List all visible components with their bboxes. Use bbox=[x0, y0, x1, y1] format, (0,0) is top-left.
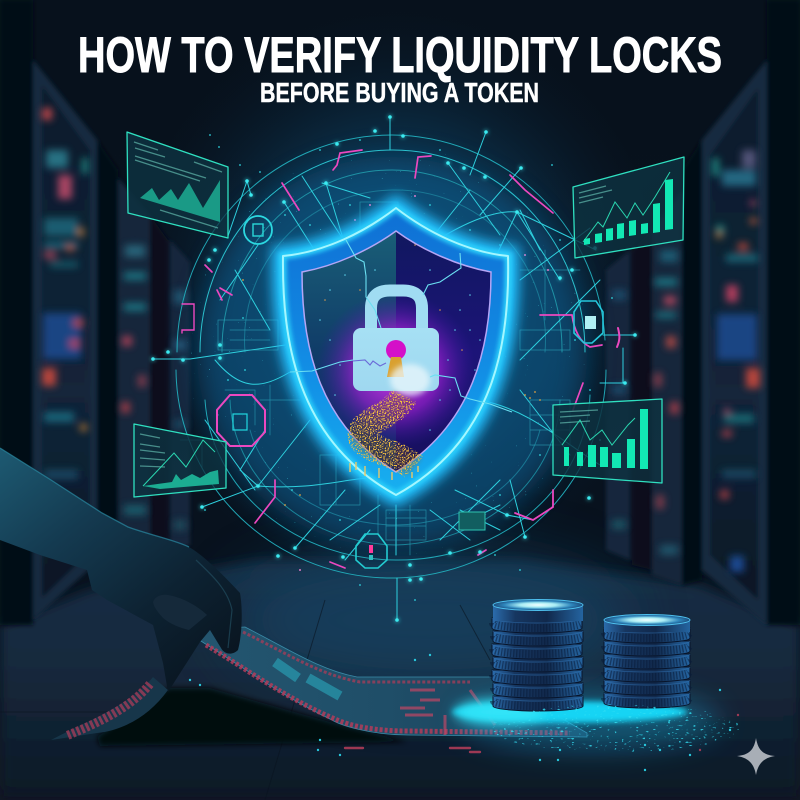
orbit rings bbox=[176, 135, 606, 578]
particle field bbox=[187, 147, 597, 557]
coin stack right bbox=[604, 614, 690, 708]
cracks bbox=[290, 240, 512, 412]
strip: main band bbox=[184, 627, 587, 737]
shield inner field bbox=[302, 232, 490, 471]
shield speckles bbox=[310, 245, 480, 445]
data panel: bottom left bbox=[134, 424, 226, 497]
node: pink octagon bbox=[217, 395, 265, 446]
grid boxes bbox=[180, 202, 580, 555]
paper strip shadow bbox=[97, 688, 408, 746]
shield bbox=[283, 208, 512, 495]
bar chart bbox=[564, 409, 648, 469]
circular holographic network bbox=[153, 117, 635, 620]
network lines bbox=[153, 117, 635, 620]
shield inner outline bbox=[302, 231, 491, 472]
network nodes bbox=[153, 117, 635, 620]
data panel: top left bbox=[127, 132, 228, 238]
rack lights right bbox=[612, 150, 760, 572]
node: qr octagon bbox=[574, 301, 603, 343]
keyhole bbox=[386, 340, 406, 377]
server racks right bbox=[606, 0, 800, 625]
data panel: top right bbox=[573, 157, 684, 258]
digital particles on floor bbox=[190, 655, 740, 770]
coin top face bbox=[604, 614, 690, 626]
hand bbox=[0, 448, 242, 692]
node: lock circle bbox=[244, 216, 272, 244]
gold token particles bbox=[350, 396, 418, 480]
icon: sparkle watermark bbox=[737, 738, 775, 775]
pink segments bbox=[182, 150, 619, 568]
rack lights left bbox=[42, 108, 186, 530]
floor bbox=[0, 550, 800, 800]
shield glow bbox=[283, 208, 508, 495]
bar chart bbox=[584, 179, 673, 245]
octagon nodes bbox=[217, 216, 603, 568]
padlock bbox=[353, 290, 439, 396]
shield band bbox=[283, 208, 508, 495]
strip: left band bbox=[51, 677, 168, 740]
coin glow bbox=[452, 690, 720, 750]
server racks left bbox=[0, 0, 190, 625]
subtitle: BEFORE BUYING A TOKEN bbox=[260, 77, 539, 108]
node: bottom octagon bbox=[356, 534, 387, 568]
coin stack left bbox=[492, 600, 583, 711]
liquidity paper strip bbox=[51, 627, 587, 740]
data panel: bottom right bbox=[553, 399, 662, 483]
coin top face bbox=[493, 600, 583, 610]
